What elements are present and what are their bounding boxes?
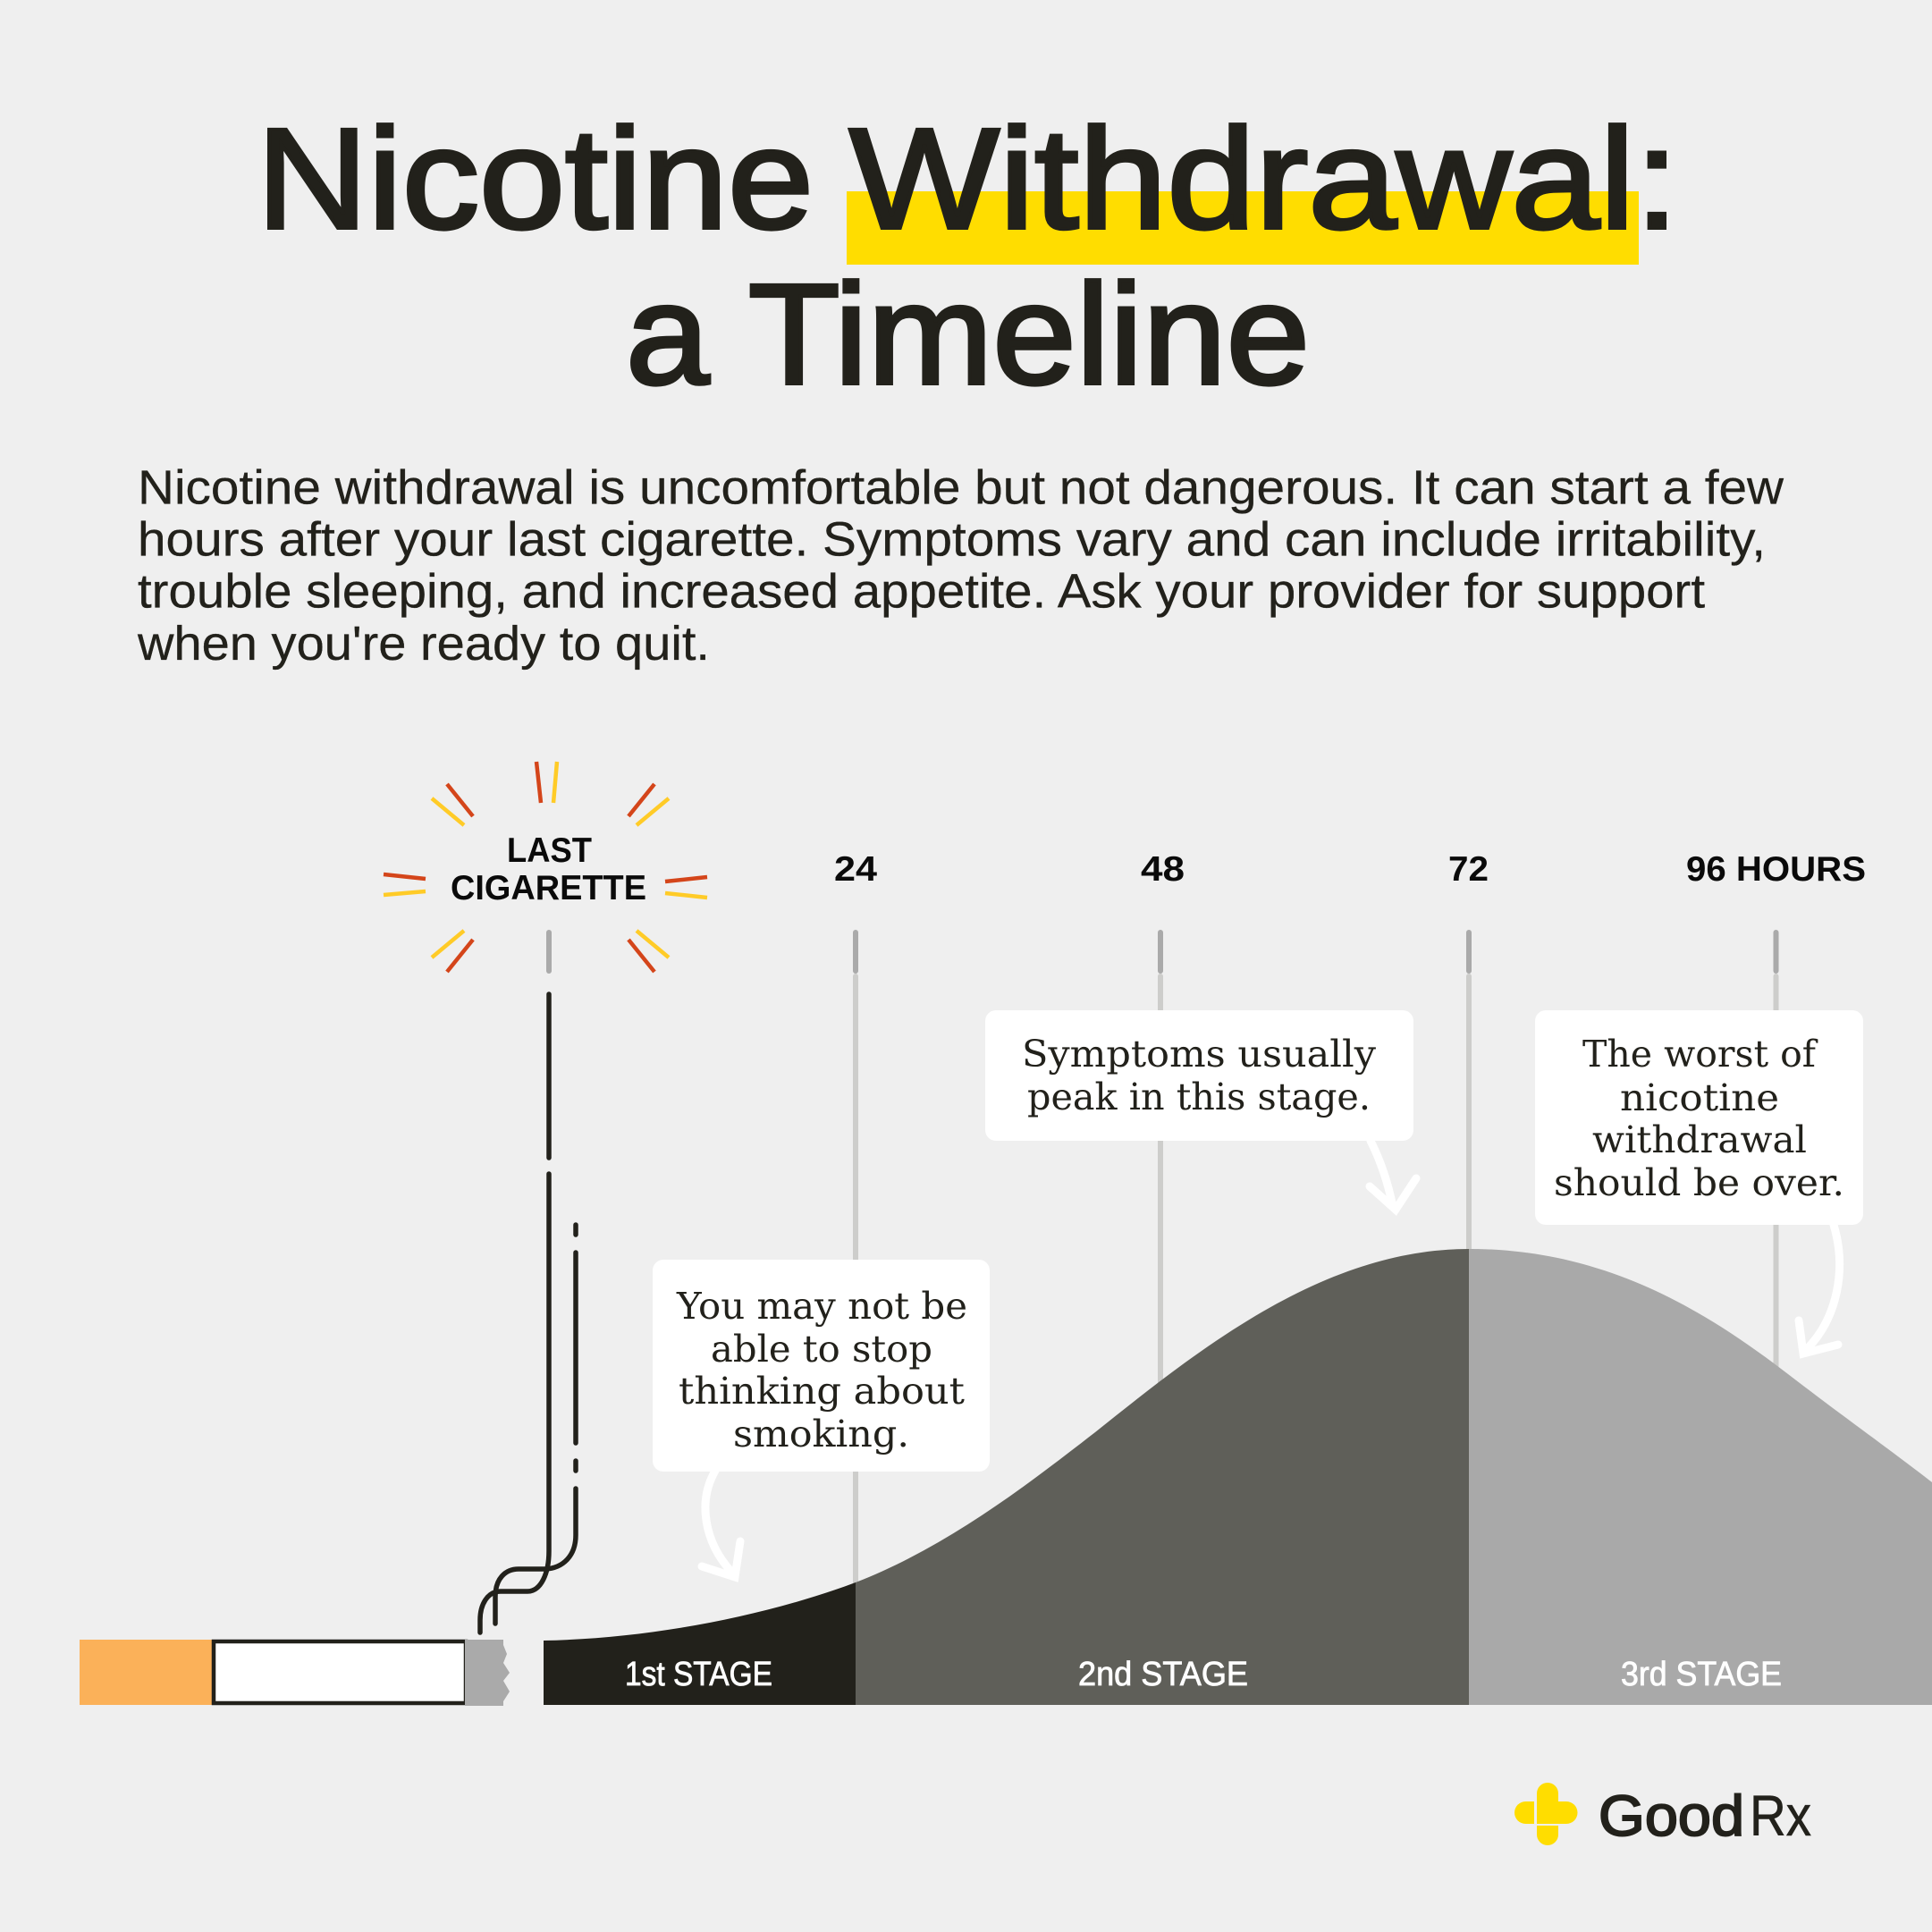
- hour grid lines: [549, 932, 1776, 1591]
- 3rd stage label: 3rd STAGE: [1621, 1656, 1782, 1693]
- wordmark: Rx: [1750, 1784, 1811, 1848]
- intro paragraph: [137, 461, 1784, 671]
- 3rd stage area: [1469, 1249, 1932, 1705]
- icon: starburst around last cigarette: [384, 762, 707, 972]
- callout: first stage: smoking.: [733, 1413, 909, 1455]
- arrow: third stage: [1799, 1225, 1840, 1354]
- callout: first stage: thinking about: [679, 1370, 966, 1413]
- withdrawal curve chart: [544, 1249, 1932, 1705]
- cigarette paper: [214, 1641, 466, 1703]
- icon: cigarette: [80, 1640, 510, 1706]
- 1st stage area: [544, 1582, 856, 1705]
- cigarette ash: [465, 1640, 510, 1706]
- last cigarette label: LAST: [507, 831, 592, 870]
- GoodRx logo: [1514, 1783, 1811, 1848]
- 2nd stage label: 2nd STAGE: [1078, 1656, 1248, 1693]
- callout: third stage: should be over.: [1554, 1161, 1844, 1204]
- icon: GoodRx cross: [1514, 1783, 1577, 1845]
- intro paragraph: when you're ready to quit.: [137, 617, 710, 671]
- title: [257, 98, 1679, 414]
- last cigarette label: CIGARETTE: [451, 869, 646, 907]
- callout: first stage: able to stop: [711, 1328, 932, 1371]
- title highlight: [847, 191, 1639, 265]
- title: a Timeline: [626, 254, 1310, 414]
- intro paragraph: hours after your last cigarette. Symptoms vary and can include irritability,: [138, 513, 1766, 567]
- callout: third stage: [1535, 1010, 1863, 1225]
- arrow: first stage: [702, 1471, 740, 1577]
- callout: second stage: [985, 1010, 1413, 1141]
- hour labels: [834, 850, 1866, 889]
- 2nd stage area: [856, 1249, 1469, 1705]
- title: Withdrawal:: [849, 98, 1679, 258]
- icon: smoke lines: [480, 994, 576, 1632]
- arrow: second stage: [1370, 1141, 1416, 1210]
- callout: third stage: withdrawal: [1592, 1118, 1807, 1161]
- callout: second stage: Symptoms usually: [1022, 1033, 1377, 1076]
- hour labels: 24: [834, 850, 877, 889]
- callout: second stage: peak in this stage.: [1027, 1076, 1371, 1118]
- wordmark: [1599, 1784, 1811, 1848]
- callout: first stage: [653, 1260, 990, 1472]
- intro paragraph: trouble sleeping, and increased appetite. Ask your provider for support: [138, 565, 1705, 619]
- last cigarette label: [451, 831, 646, 907]
- callout: first stage: You may not be: [676, 1285, 967, 1328]
- cigarette filter: [80, 1640, 212, 1705]
- 1st stage label: 1st STAGE: [625, 1656, 772, 1693]
- hour labels: 72: [1448, 850, 1489, 889]
- intro paragraph: Nicotine withdrawal is uncomfortable but not dangerous. It can start a few: [138, 461, 1784, 515]
- title: Nicotine: [257, 98, 814, 258]
- hour labels: 48: [1141, 850, 1185, 889]
- hour labels: 96 HOURS: [1686, 850, 1866, 889]
- callout: third stage: nicotine: [1620, 1076, 1779, 1119]
- wordmark: Good: [1599, 1784, 1744, 1848]
- callout: third stage: The worst of: [1582, 1033, 1818, 1076]
